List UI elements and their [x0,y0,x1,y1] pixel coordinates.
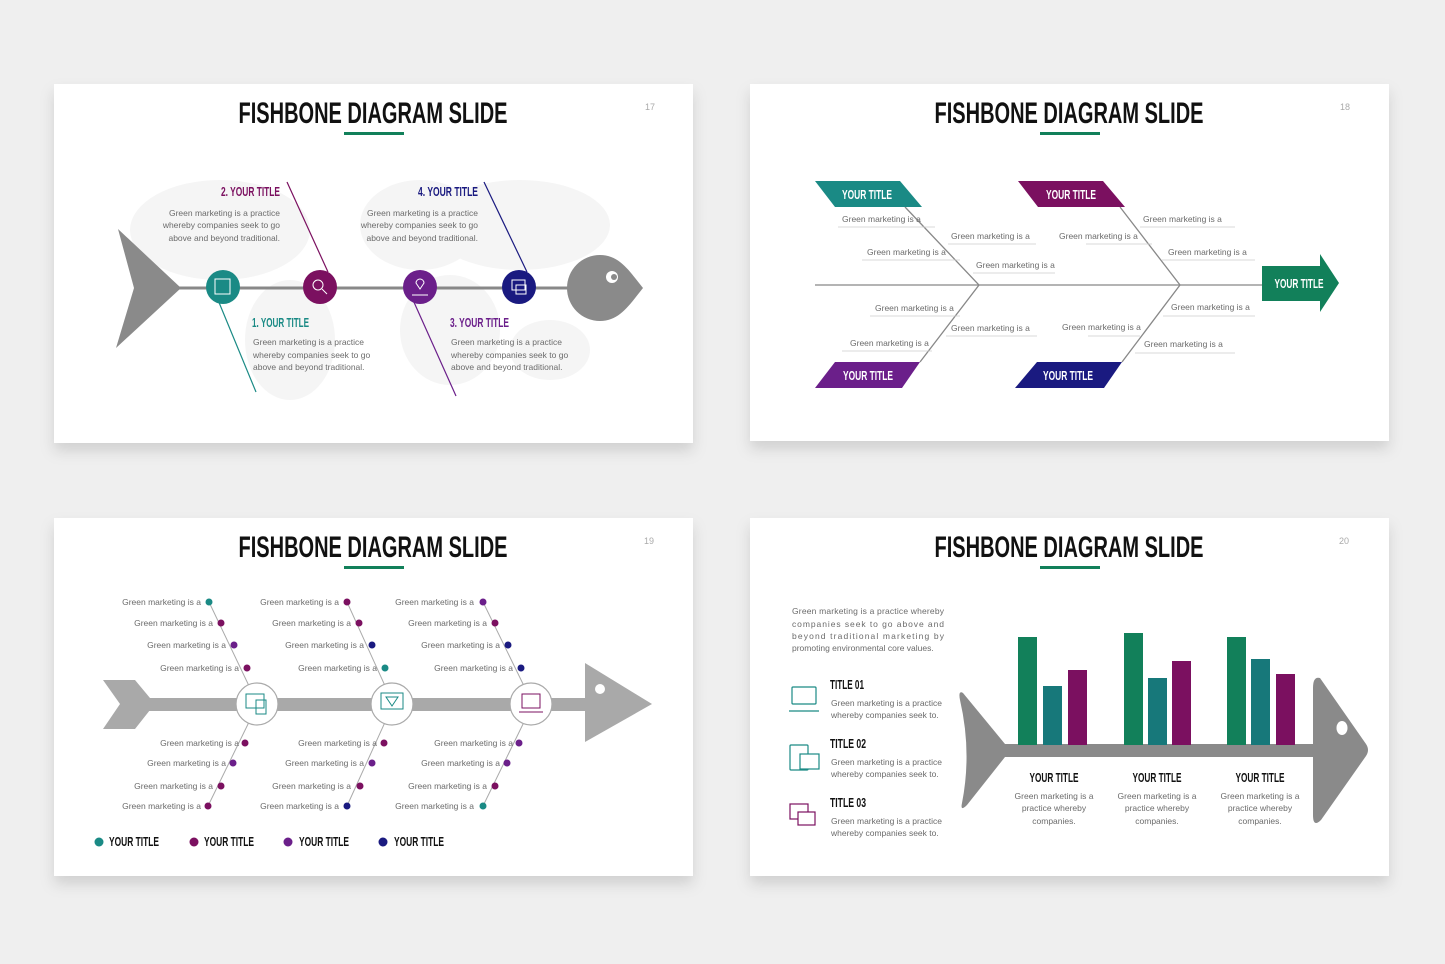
cause labels with dots: Green marketing is a [134,781,213,791]
cause labels with dots [122,597,524,811]
intro paragraph: Green marketing is a practice whereby [792,606,945,616]
title: FISHBONE DIAGRAM SLIDE [238,531,508,564]
category labels: companies. [1238,816,1282,826]
intro paragraph: companies seek to go above and [792,619,944,629]
item 02 [790,736,942,779]
bones [208,602,525,806]
page number: 19 [644,536,654,546]
text: 1 [252,315,370,372]
cause labels with dots: Green marketing is a [285,640,364,650]
text: 1: Green marketing is a practice [253,337,364,347]
item 03 [790,795,942,838]
text: 4: above and beyond traditional. [366,233,478,243]
item 03: whereby companies seek to. [830,828,939,838]
text: 1: above and beyond traditional. [253,362,365,372]
tail [103,680,150,729]
cause labels with dots: Green marketing is a [285,758,364,768]
category labels: YOUR TITLE [1030,770,1079,785]
item 02: whereby companies seek to. [830,769,939,779]
cause labels with dots: Green marketing is a [272,618,351,628]
title: FISHBONE DIAGRAM SLIDE [934,97,1204,130]
text: 4: Green marketing is a practice [367,208,478,218]
text: 4: 4. YOUR TITLE [418,184,478,199]
cause labels with dots: Green marketing is a [408,781,487,791]
legend: YOUR TITLE [109,834,159,849]
cause labels with dots: Green marketing is a [260,597,339,607]
text: 3: 3. YOUR TITLE [450,315,509,330]
head [585,663,652,742]
label tags: YOUR TITLE [842,187,892,202]
label tags: YOUR TITLE [1046,187,1096,202]
cause labels with dots: Green marketing is a [298,738,377,748]
label tags: YOUR TITLE [843,368,893,383]
text: 3 [450,315,568,372]
category labels: Green marketing is a [1015,791,1094,801]
fish head [567,255,643,321]
label tags: YOUR TITLE [1043,368,1093,383]
category labels: practice whereby [1125,803,1190,813]
spine and bones [815,207,1262,362]
panel: slide 20 [750,518,1389,876]
item 01: Green marketing is a practice [831,698,942,708]
text: 3: above and beyond traditional. [451,362,563,372]
cause labels with dots: Green marketing is a [395,801,474,811]
cause labels with dots: Green marketing is a [160,738,239,748]
legend: YOUR TITLE [204,834,254,849]
text: 2 [162,184,280,243]
fish head [1313,678,1368,823]
bones [218,182,527,396]
category labels: Green marketing is a [1221,791,1300,801]
fish tail [116,229,181,348]
cause labels with dots: Green marketing is a [434,738,513,748]
cause labels with dots: Green marketing is a [147,640,226,650]
item 01: whereby companies seek to. [830,710,939,720]
world map background [130,180,610,400]
cause labels with dots: Green marketing is a [134,618,213,628]
icon circles [206,270,536,304]
cause labels: Green marketing is a [1144,339,1223,349]
spine [148,698,588,711]
title: FISHBONE DIAGRAM SLIDE [238,97,508,130]
category labels: practice whereby [1022,803,1087,813]
item 02: Green marketing is a practice [831,757,942,767]
arrow: your title: YOUR TITLE [1274,276,1324,291]
category labels: YOUR TITLE [1236,770,1285,785]
intro paragraph [792,606,945,653]
bar chart [1018,633,1295,745]
text: 1: 1. YOUR TITLE [252,315,309,330]
page number: 17 [645,102,655,112]
cause labels: Green marketing is a [842,214,921,224]
cause labels with dots: Green marketing is a [147,758,226,768]
item 03: Green marketing is a practice [831,816,942,826]
text: 3: whereby companies seek to go [450,350,568,360]
intro paragraph: promoting environmental core values. [792,643,934,653]
text: 4: whereby companies seek to go [360,220,478,230]
title: FISHBONE DIAGRAM SLIDE [934,531,1204,564]
cause labels: Green marketing is a [976,260,1055,270]
panel: slide 17 [54,84,693,443]
panel: slide 19 [54,518,693,876]
category labels: Green marketing is a [1118,791,1197,801]
legend: YOUR TITLE [299,834,349,849]
cause labels with dots: Green marketing is a [122,801,201,811]
cause labels with dots: Green marketing is a [160,663,239,673]
cause labels: Green marketing is a [1143,214,1222,224]
cause labels: Green marketing is a [1059,231,1138,241]
cause labels with dots: Green marketing is a [421,640,500,650]
cause labels: Green marketing is a [867,247,946,257]
legend: YOUR TITLE [394,834,444,849]
item 01: TITLE 01 [830,677,864,692]
cause labels with dots: Green marketing is a [122,597,201,607]
text: 2: Green marketing is a practice [169,208,280,218]
cause labels with dots: Green marketing is a [434,663,513,673]
cause labels: Green marketing is a [1171,302,1250,312]
item 01 [789,677,942,720]
cause labels with dots: Green marketing is a [408,618,487,628]
cause labels: Green marketing is a [951,231,1030,241]
item 02: TITLE 02 [830,736,866,751]
fish tail [959,692,1005,808]
cause labels: Green marketing is a [1062,322,1141,332]
category labels: companies. [1032,816,1076,826]
cause labels with dots: Green marketing is a [395,597,474,607]
category labels: companies. [1135,816,1179,826]
category labels [1015,770,1300,826]
intro paragraph: beyond traditional marketing by [792,631,945,641]
cause labels: Green marketing is a [850,338,929,348]
text: 2: 2. YOUR TITLE [221,184,280,199]
cause labels with dots: Green marketing is a [421,758,500,768]
label tags [815,181,1125,388]
cause labels: Green marketing is a [951,323,1030,333]
cause labels with dots: Green marketing is a [260,801,339,811]
legend [94,834,444,849]
category labels: practice whereby [1228,803,1293,813]
text: 4 [360,184,478,243]
icon nodes [236,683,552,725]
page number: 18 [1340,102,1350,112]
text: 1: whereby companies seek to go [252,350,370,360]
text: 2: above and beyond traditional. [168,233,280,243]
cause labels: Green marketing is a [1168,247,1247,257]
panel: slide 18 [750,84,1389,441]
cause labels: Green marketing is a [875,303,954,313]
page number: 20 [1339,536,1349,546]
text: 3: Green marketing is a practice [451,337,562,347]
arrow: your title [1262,254,1339,312]
item 03: TITLE 03 [830,795,866,810]
cause labels with dots: Green marketing is a [298,663,377,673]
text: 2: whereby companies seek to go [162,220,280,230]
cause labels [838,214,1255,353]
cause labels with dots: Green marketing is a [272,781,351,791]
category labels: YOUR TITLE [1132,770,1182,785]
spine [178,286,575,290]
spine [1000,744,1325,757]
